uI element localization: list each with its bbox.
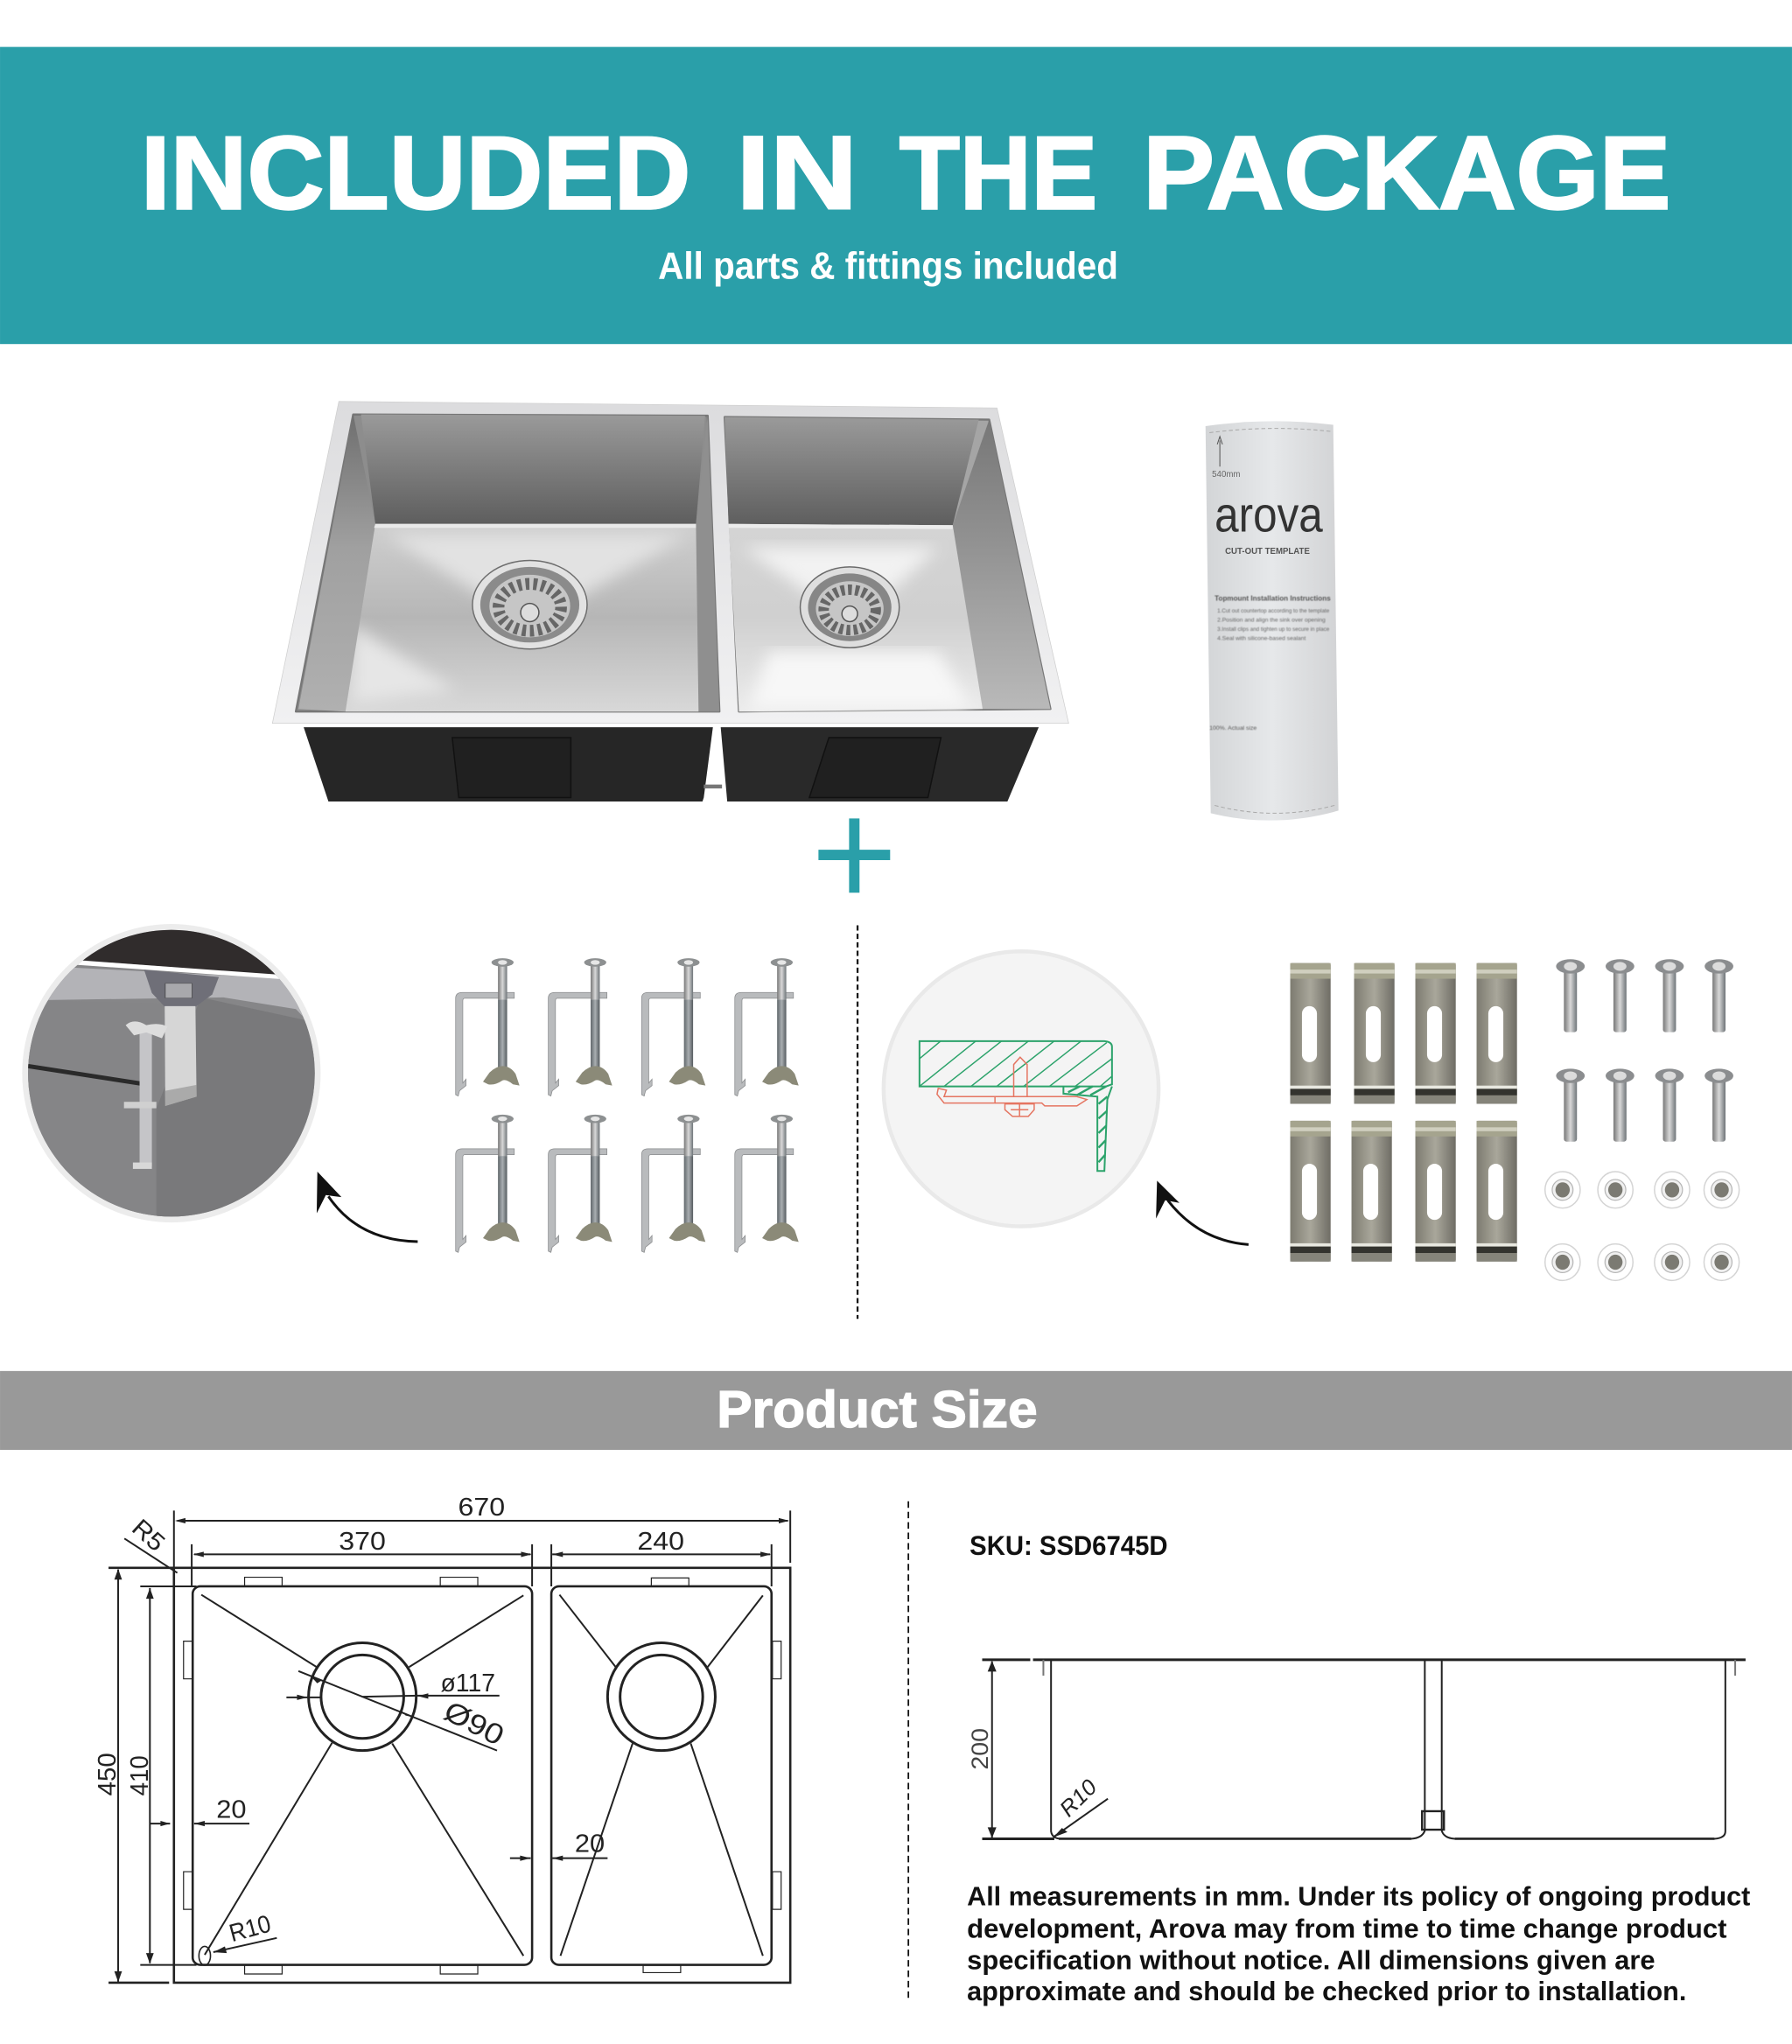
- template dimension arrow: [1217, 437, 1222, 466]
- sink outline: [108, 1568, 790, 1983]
- side view dimension drawing: [967, 1660, 1746, 1838]
- template instructions: 2.Position and align the sink over opening: [1217, 617, 1326, 623]
- nut set: eight nuts: [1545, 1172, 1740, 1280]
- header banner: [0, 47, 1792, 344]
- product size bar: [0, 1371, 1792, 1450]
- dimension labels: 20: [216, 1796, 247, 1824]
- disclaimer note: [967, 1882, 1750, 2006]
- dimension labels: 370: [339, 1527, 386, 1555]
- dimension labels: 670: [458, 1493, 505, 1521]
- SKU label: SKU: SSD6745D: [970, 1530, 1168, 1561]
- clip set: eight slotted clips: [1291, 963, 1517, 1262]
- arrow: clips to diagram: [1156, 1180, 1249, 1244]
- dimension labels: 410: [125, 1755, 153, 1796]
- dimension labels: [93, 1493, 684, 1947]
- circular diagram: mounting cross-section: [884, 951, 1158, 1227]
- template instructions: 4.Seal with silicone-based sealant: [1217, 635, 1306, 641]
- dimension labels: 450: [93, 1753, 121, 1796]
- right bowl: [724, 417, 1050, 711]
- product size bar: Product Size: [717, 1380, 1038, 1438]
- cut-out template roll: CUT-OUT TEMPLATE: [1225, 547, 1310, 556]
- left drain strainer: [472, 560, 587, 649]
- plus sign: [818, 818, 890, 892]
- dimension arrowheads: [115, 1518, 789, 1982]
- right drain strainer: [801, 567, 900, 648]
- disclaimer note: approximate and should be checked prior to installation.: [967, 1977, 1686, 2006]
- template instructions: [1209, 595, 1331, 732]
- template instructions: Topmount Installation Instructions: [1214, 595, 1331, 603]
- countertop hatch: [920, 1041, 1112, 1171]
- cut-out template roll: 540mm: [1212, 470, 1240, 480]
- bowl slope lines: [201, 1595, 763, 1956]
- title: IN: [737, 115, 858, 231]
- product photo: double bowl sink: [272, 402, 1068, 802]
- subtitle: All parts & fittings included: [658, 246, 1118, 288]
- mounting tabs: [184, 1578, 781, 1974]
- top view dimension drawing: [93, 1493, 790, 1983]
- brand logo: arova: [1214, 487, 1323, 542]
- dimension labels: 240: [637, 1527, 684, 1555]
- circular photo: clamp installed: [19, 919, 335, 1231]
- clip and bolt: [937, 1057, 1087, 1116]
- height label: 200: [967, 1728, 993, 1770]
- template instructions: 3.Install clips and tighten up to secure in place: [1217, 626, 1329, 633]
- title: [141, 115, 1670, 231]
- title: PACKAGE: [1143, 115, 1670, 231]
- arrow: clamps to photo: [317, 1172, 417, 1242]
- dimension labels: 20: [575, 1829, 605, 1857]
- disclaimer note: All measurements in mm. Under its policy of ongoing product: [967, 1882, 1750, 1912]
- title: THE: [900, 115, 1097, 231]
- dimension labels: R10: [226, 1909, 274, 1947]
- template instructions: 100%. Actual size: [1209, 725, 1256, 732]
- disclaimer note: specification without notice. All dimensions given are: [967, 1946, 1656, 1976]
- left bowl: [296, 415, 719, 711]
- cut-out template roll: [1206, 421, 1339, 821]
- title: INCLUDED: [141, 115, 690, 231]
- clamp set: eight clamps: [456, 958, 799, 1252]
- bolt set: eight bolts: [1556, 959, 1733, 1142]
- dimension lines: [118, 1510, 790, 1982]
- right bowl outline: [551, 1586, 772, 1965]
- radius label: R10: [1055, 1774, 1102, 1822]
- disclaimer note: development, Arova may from time to time change product: [967, 1914, 1727, 1944]
- dimension labels: R5: [127, 1513, 171, 1557]
- left bowl outline: [192, 1586, 532, 1965]
- drain rings: [309, 1643, 715, 1751]
- dimension labels: ø117: [440, 1669, 495, 1697]
- dimension labels: Ø90: [439, 1694, 509, 1752]
- sink flange: [272, 402, 1068, 724]
- template instructions: 1.Cut out countertop according to the template: [1217, 608, 1329, 614]
- sink body underside: [304, 727, 1039, 802]
